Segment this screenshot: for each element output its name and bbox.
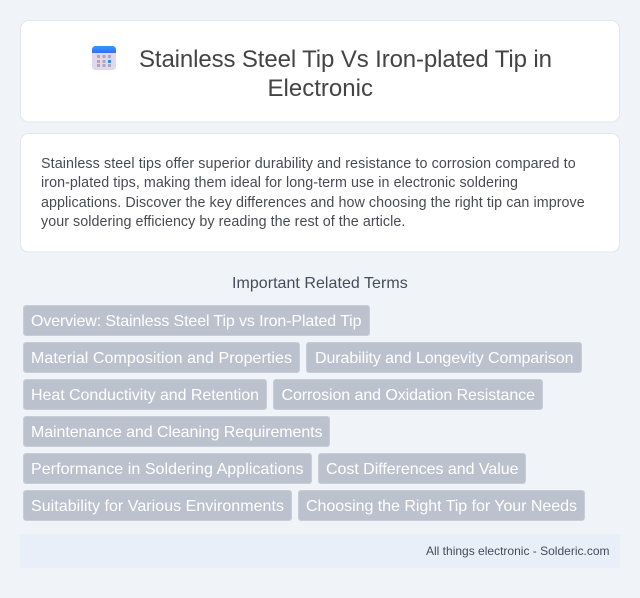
summary paragraph: Stainless steel tips offer superior durability and resistance to corrosion compared to: [41, 156, 576, 172]
tag: corrosion: [274, 380, 542, 410]
tag: performance: [24, 454, 312, 484]
summary paragraph: iron-plated tips, making them ideal for long-term use in electronic soldering: [41, 175, 518, 191]
footer: [20, 534, 620, 568]
footer: All things electronic - Solderic.com: [426, 544, 610, 558]
tag: choosing: Choosing the Right Tip for Your Needs: [306, 498, 577, 515]
tag: material: Material Composition and Properties: [31, 350, 292, 367]
tag: performance: Performance in Soldering Applications: [31, 461, 304, 478]
tag: cost: [318, 454, 526, 484]
title: Stainless Steel Tip Vs Iron-plated Tip in: [139, 46, 552, 73]
summary paragraph: your soldering efficiency by reading the rest of the article.: [41, 214, 405, 230]
summary paragraph: applications. Discover the key differences and how choosing the right tip can improve: [41, 195, 585, 211]
tag: durability: Durability and Longevity Comparison: [315, 350, 574, 367]
heading: related terms: Important Related Terms: [232, 275, 408, 292]
tag: heat: [24, 380, 266, 410]
tag: suitability: Suitability for Various Environments: [31, 498, 284, 515]
tag: cost: Cost Differences and Value: [326, 461, 519, 478]
tag: choosing: [298, 490, 584, 520]
panel: summary card: [20, 134, 620, 252]
tag: durability: [306, 342, 582, 372]
tag group: related terms: [24, 306, 584, 520]
title: Electronic: [268, 75, 373, 102]
tag: material: [24, 342, 300, 372]
tag: corrosion: Corrosion and Oxidation Resistance: [282, 387, 535, 404]
summary paragraph: [41, 156, 585, 230]
tag: overview: [24, 306, 370, 336]
title: [139, 46, 552, 102]
tag: heat: Heat Conductivity and Retention: [31, 387, 259, 404]
panel: title card: [20, 20, 620, 122]
tag: maintenance: [24, 416, 330, 446]
icon: calendar: [92, 46, 116, 70]
tag: suitability: [24, 490, 292, 520]
tag: maintenance: Maintenance and Cleaning Requirements: [31, 424, 322, 441]
tag: overview: Overview: Stainless Steel Tip vs Iron-Plated Tip: [31, 313, 362, 330]
